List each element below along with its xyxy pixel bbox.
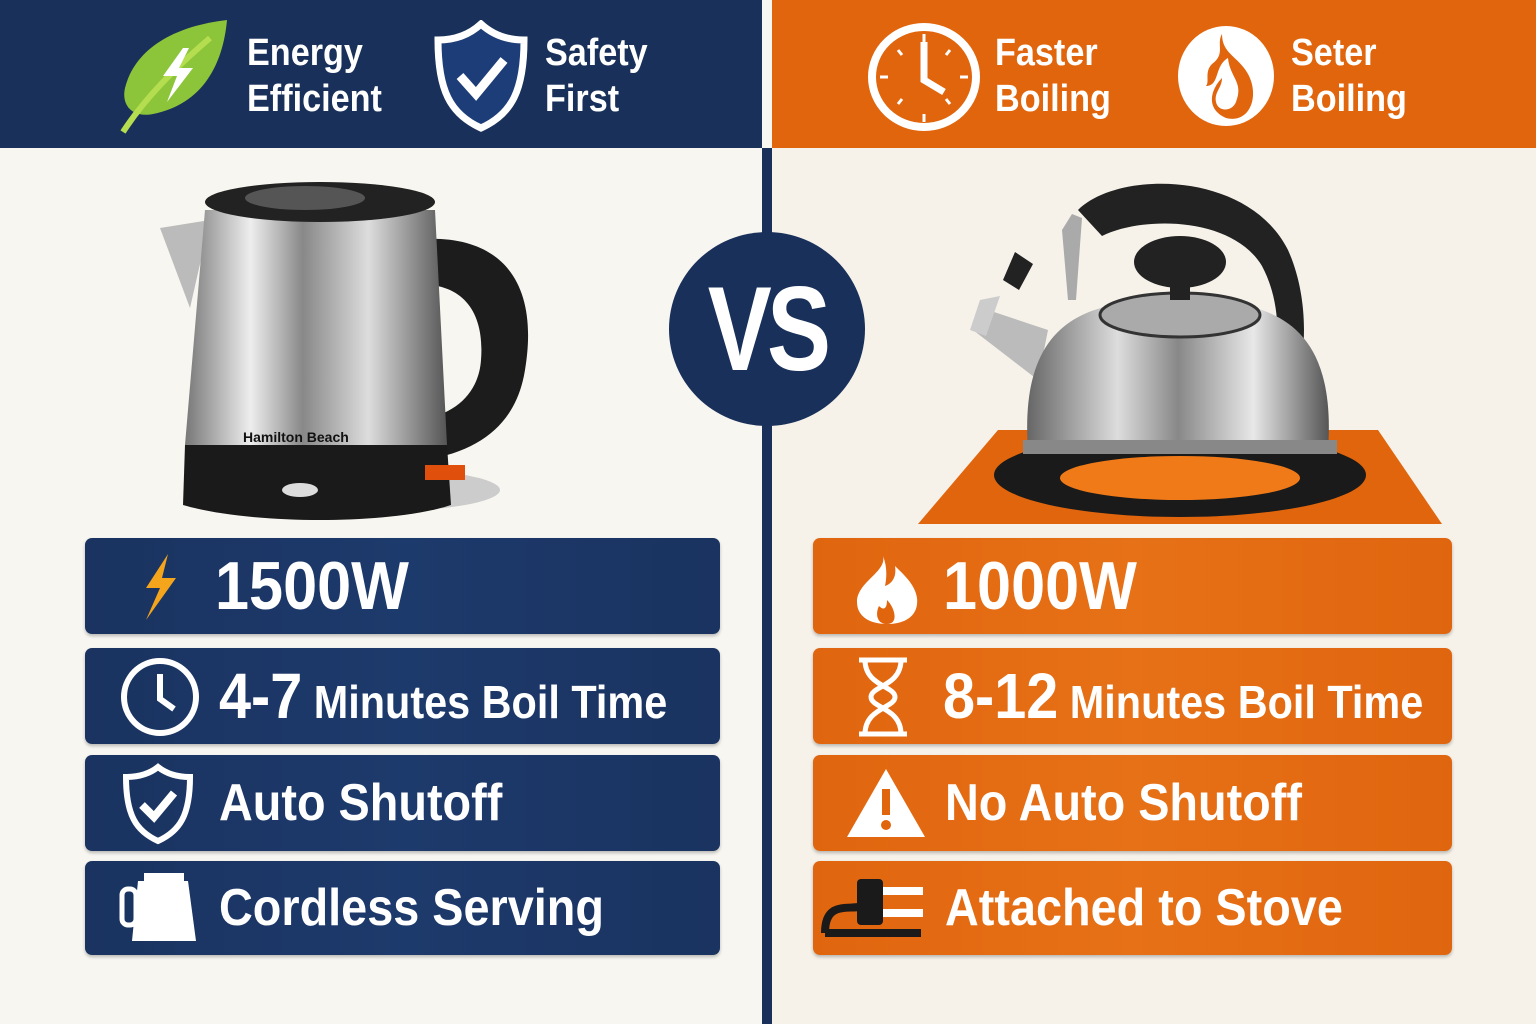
stovetop kettle [918,184,1442,524]
bar: boil time: 8-12 Minutes Boil Time [943,660,1423,732]
icon: flame [856,556,918,624]
right background [772,0,1536,1024]
bar: 1500W: 1500W [215,548,409,624]
bar: no auto shutoff: No Auto Shutoff [945,774,1302,832]
text: safety first: First [545,78,619,120]
VS badge: VS [708,262,826,396]
electric kettle [160,182,528,520]
icon: kettle [120,873,196,941]
icon: leaf [120,20,227,134]
text: seter boiling: Seter [1291,32,1377,74]
VS badge [669,232,865,426]
bar: attached to stove [813,861,1452,955]
bar: cordless [85,861,720,955]
icon: plug [821,879,923,937]
divider [762,148,772,1024]
icon: clock [121,658,199,736]
bar: 1500W [85,538,720,634]
text: energy efficient: Efficient [247,78,382,120]
bar: 1000W [813,538,1452,634]
icon: bolt [146,554,176,620]
bar: attached to stove: Attached to Stove [945,879,1343,937]
text: energy efficient: Energy [247,32,363,74]
text: energy efficient [247,32,382,120]
bar: boil time [85,648,720,744]
left feature bars [83,538,722,959]
right feature bars [811,538,1454,959]
bar: auto shutoff: Auto Shutoff [219,774,502,832]
icon: shield [434,20,528,132]
bar: boil time: 4-7 Minutes Boil Time [219,660,667,732]
bar: 1000W: 1000W [943,548,1137,624]
bar: cordless: Cordless Serving [219,879,604,937]
header left [0,0,762,148]
text: faster boiling [995,32,1111,120]
bar: no auto shutoff [813,755,1452,851]
icon: warning [847,769,925,837]
bar: auto shutoff [85,755,720,851]
icon: flame drop [1178,26,1274,126]
icon: hourglass [859,658,907,736]
text: safety first: Safety [545,32,648,74]
text: seter boiling: Boiling [1291,78,1407,120]
text: faster boiling: Faster [995,32,1098,74]
text: faster boiling: Boiling [995,78,1111,120]
bar: boil time [813,648,1452,744]
text: safety first [545,32,648,120]
header right [772,0,1536,148]
icon: clock [868,23,980,131]
electric kettle: Hamilton Beach [243,429,349,445]
text: seter boiling [1291,32,1407,120]
icon: shield check [123,763,193,844]
